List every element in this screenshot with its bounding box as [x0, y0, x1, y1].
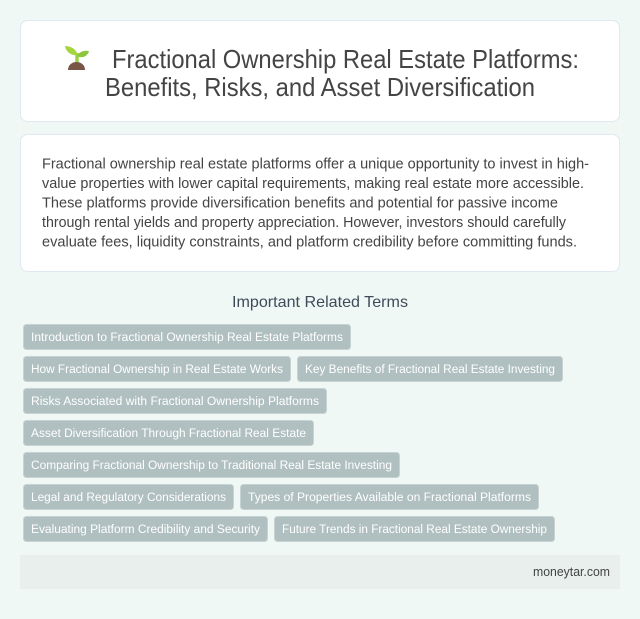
tag: Future Trends in Fractional Real Estate Ownership — [282, 522, 547, 536]
footer — [20, 555, 620, 589]
tag: Types of Properties Available on Fractional Platforms — [248, 490, 531, 504]
tag: Risks Associated with Fractional Ownership Platforms — [31, 394, 319, 408]
intro paragraph: These platforms provide diversification benefits and potential for passive income — [42, 196, 558, 212]
intro paragraph — [42, 156, 589, 250]
icon: sprout — [65, 46, 89, 70]
tag — [274, 516, 554, 542]
intro paragraph: value properties with lower capital requirements, making real estate more accessible. — [42, 176, 584, 192]
title — [105, 46, 579, 102]
tag: Key Benefits of Fractional Real Estate Investing — [305, 362, 555, 376]
tag: Evaluating Platform Credibility and Security — [31, 522, 261, 536]
intro paragraph: evaluate fees, liquidity constraints, and platform credibility before committing funds. — [42, 234, 577, 250]
title: Fractional Ownership Real Estate Platforms: — [112, 46, 579, 74]
tag — [24, 420, 314, 446]
tag — [24, 452, 400, 478]
tag list — [24, 324, 562, 542]
tag: How Fractional Ownership in Real Estate Works — [31, 362, 283, 376]
tag — [240, 484, 538, 510]
tag: Introduction to Fractional Ownership Real Estate Platforms — [31, 330, 343, 344]
title: Benefits, Risks, and Asset Diversification — [105, 74, 535, 102]
tag: Legal and Regulatory Considerations — [31, 490, 226, 504]
tag — [24, 516, 268, 542]
tag — [24, 484, 234, 510]
panel: intro text card — [20, 134, 620, 272]
intro paragraph: through rental yields and property appreciation. However, investors should carefully — [42, 215, 567, 231]
panel: title card — [20, 20, 620, 122]
tag: Comparing Fractional Ownership to Traditional Real Estate Investing — [31, 458, 392, 472]
heading: related terms: Important Related Terms — [232, 294, 408, 311]
footer: moneytar.com — [533, 564, 610, 579]
tag — [24, 324, 350, 350]
intro paragraph: Fractional ownership real estate platforms offer a unique opportunity to invest in high- — [42, 156, 589, 172]
tag — [298, 356, 562, 382]
tag — [24, 356, 290, 382]
tag: Asset Diversification Through Fractional Real Estate — [31, 426, 306, 440]
tag — [24, 388, 326, 414]
